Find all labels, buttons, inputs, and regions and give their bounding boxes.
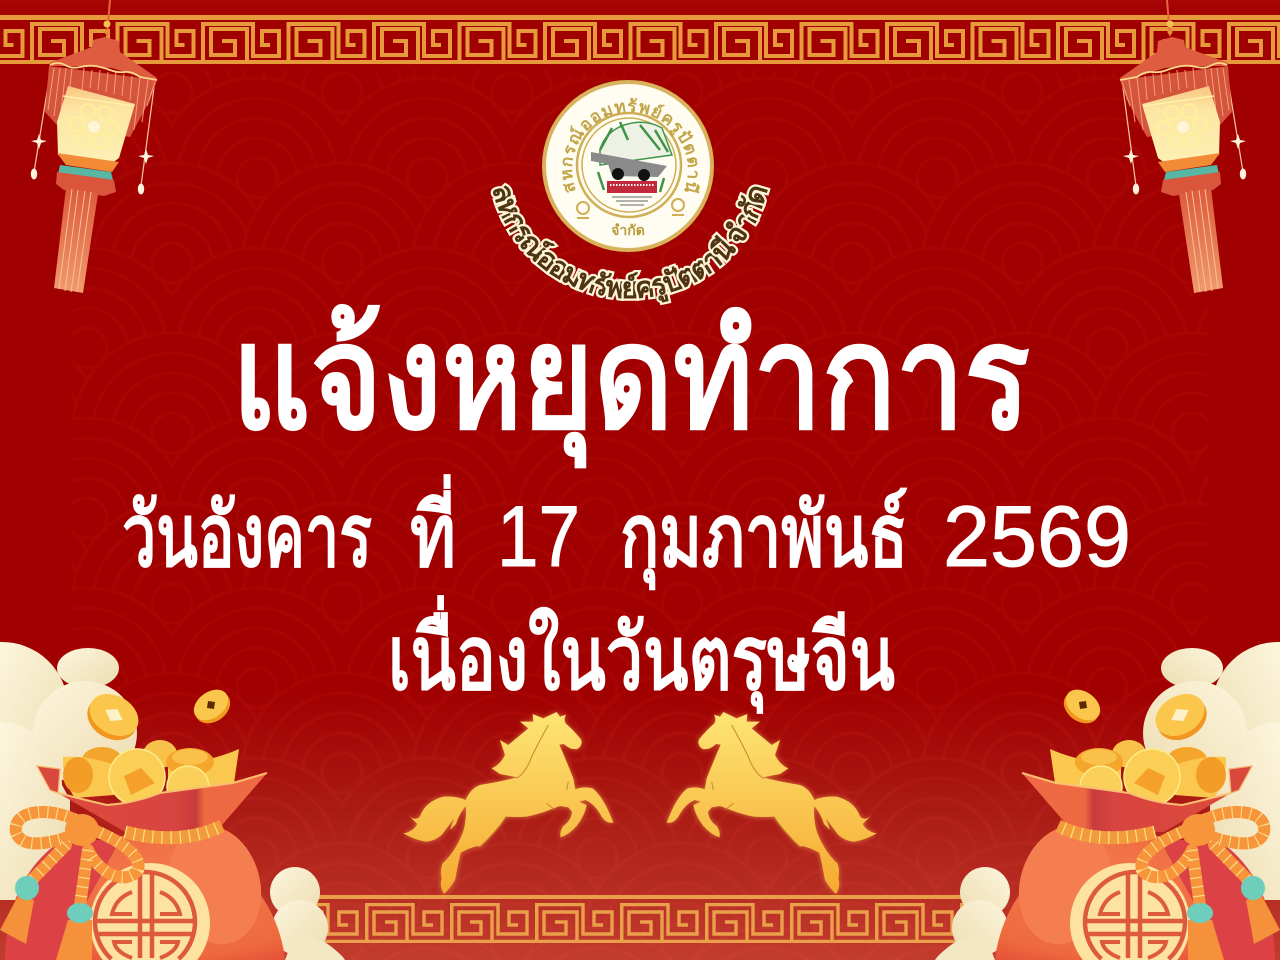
seal small icons <box>577 199 684 218</box>
curved organisation name: สหกรณ์ออมทรัพย์ครูปัตตานี จำกัด <box>490 182 771 306</box>
horse right <box>667 712 877 894</box>
lantern left <box>31 0 157 293</box>
date line: 17 <box>497 489 580 585</box>
bottom border band <box>300 895 980 943</box>
seal scene <box>591 122 672 205</box>
date line: วันอังคาร <box>122 489 372 586</box>
seal ring text: สหกรณ์ออมทรัพย์ครูปัตตานี <box>562 98 700 194</box>
date line: 2569 <box>943 489 1131 585</box>
heading: แจ้งหยุดทำการ <box>232 298 1030 469</box>
lantern right <box>1120 0 1246 293</box>
money bag right <box>935 642 1280 960</box>
logo seal <box>542 80 714 252</box>
reason line: เนื่องในวันตรุษจีน <box>388 595 895 715</box>
seal bottom text: จำกัด <box>611 223 645 239</box>
money bag left <box>0 642 345 960</box>
horse left <box>403 712 613 894</box>
date line: กุมภาพันธ์ <box>620 487 908 591</box>
date line <box>122 474 1131 591</box>
top border band <box>0 15 1280 64</box>
date line: ที่ <box>410 474 456 586</box>
